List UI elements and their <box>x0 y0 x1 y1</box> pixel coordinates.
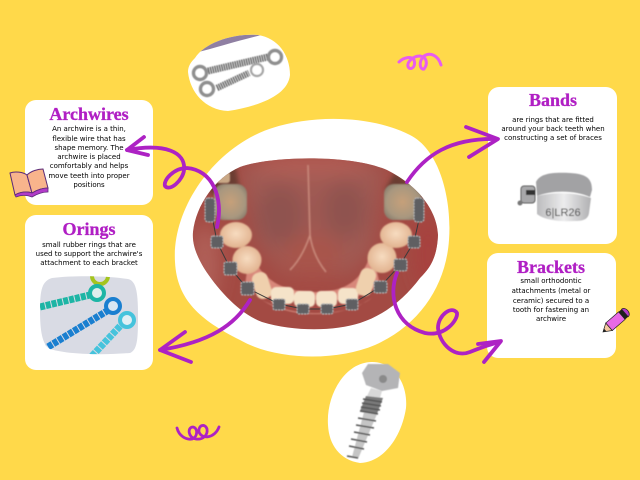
text: orings description: used to support the archwire's <box>36 250 143 258</box>
text: bands description: around your back teeth when <box>501 125 605 133</box>
panel: brackets <box>487 253 616 358</box>
icon: open book <box>10 169 48 197</box>
text: archwires description: comfortably and helps <box>50 162 129 170</box>
image: link springs blob <box>188 35 290 111</box>
archwire <box>212 221 419 310</box>
teeth <box>214 172 421 307</box>
text: archwires description: positions <box>73 181 105 189</box>
panel: archwires <box>25 100 153 205</box>
text: orings description: attachment to each bracket <box>40 259 138 267</box>
gum behind teeth <box>245 260 380 300</box>
text: brackets description: small orthodontic <box>520 277 582 285</box>
heading: brackets: Brackets <box>517 257 585 277</box>
squiggle: purple <box>177 425 219 439</box>
text: orings description: small rubber rings that are <box>42 241 136 249</box>
arrow: to brackets <box>393 273 501 362</box>
panel: orings <box>25 215 153 370</box>
text: archwires description: flexible wire that has <box>52 135 126 143</box>
arrow: to orings <box>160 300 250 362</box>
heading: archwires: Archwires <box>49 104 129 124</box>
text: bands description: constructing a set of braces <box>504 134 602 142</box>
text: archwires description: An archwire is a thin, <box>52 125 126 133</box>
text: archwires description: move teeth into proper <box>48 172 130 180</box>
gum under teeth <box>265 300 368 315</box>
icon: pencil <box>600 307 631 336</box>
central white blob <box>175 119 449 356</box>
text: brackets description: archwire <box>536 315 566 323</box>
tongue frenulum <box>290 165 326 272</box>
arrow: to bands <box>407 127 498 182</box>
text: archwires description: shape memory. The <box>54 144 124 152</box>
brackets <box>205 198 424 314</box>
squiggle: pink <box>399 54 441 69</box>
image: metal band <box>518 173 592 221</box>
text: archwires description: archwire is placed <box>57 153 121 161</box>
text: bands description: are rings that are fitted <box>512 116 594 124</box>
text: brackets description: ceramic) secured to a <box>513 297 589 305</box>
dark molar corners <box>208 168 242 196</box>
heading: bands: Bands <box>529 90 577 110</box>
text: brackets description: tooth for fastening an <box>513 306 589 314</box>
text: brackets description: attachments (metal or <box>512 287 590 295</box>
mouth photo <box>190 150 440 335</box>
image: screw blob <box>328 362 406 463</box>
arrow: to archwires <box>127 137 219 227</box>
panel: bands <box>488 87 617 244</box>
heading: orings: Orings <box>62 219 116 239</box>
image: metal band: 6|LR26 <box>545 207 581 219</box>
image: o-ring chains <box>40 276 138 354</box>
